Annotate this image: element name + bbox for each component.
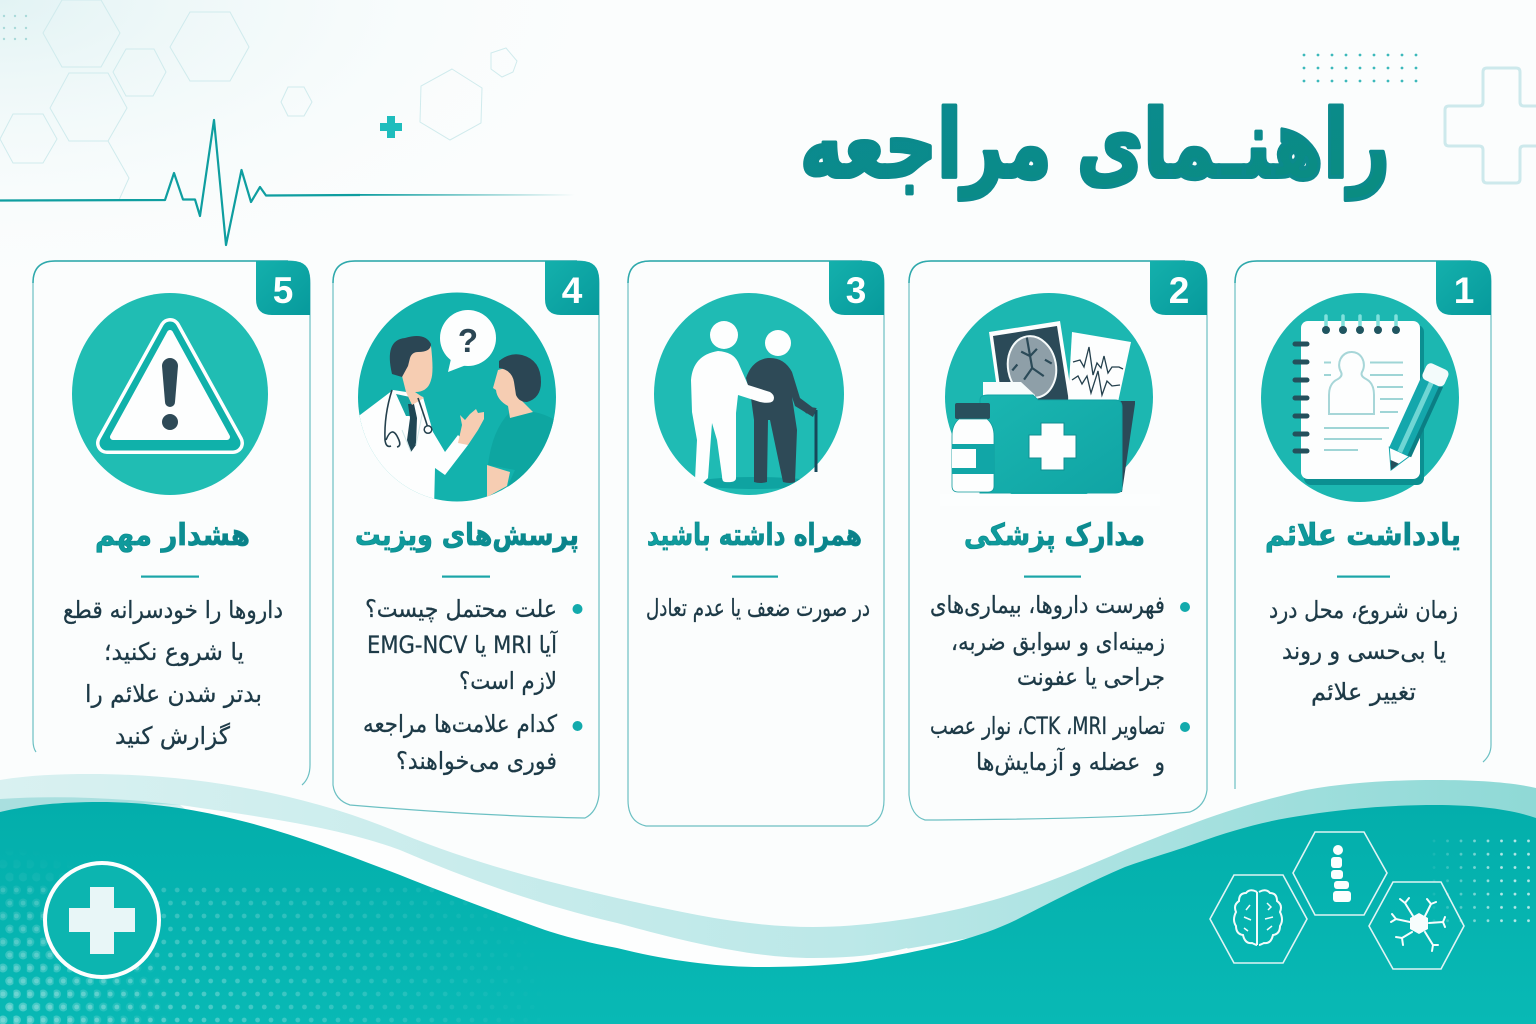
heading: یادداشت علائم	[1265, 518, 1461, 553]
panel: card 3 companion	[628, 261, 884, 826]
badge 1: 1	[1454, 270, 1474, 311]
heading: هشدار مهم	[95, 518, 250, 553]
panel: card 1 symptom notes	[1235, 261, 1491, 789]
decorative hexagons top left	[0, 0, 517, 200]
icon: notepad and pencil	[1261, 293, 1459, 502]
bullet list: جراحی یا عفونت	[1017, 663, 1165, 691]
heartbeat line	[0, 120, 575, 245]
body text: زمان شروع، محل درد	[1269, 596, 1458, 624]
heading: مدارک پزشکی	[964, 518, 1145, 553]
badge 3: 3	[846, 270, 866, 311]
body text: گزارش کنید	[115, 722, 231, 750]
bullet list: و عضله و آزمایش‌ها	[976, 747, 1165, 776]
icon: small plus	[380, 116, 402, 138]
bullet list: فهرست داروها، بیماری‌های	[930, 591, 1165, 619]
badge 3	[829, 261, 884, 315]
icon: spine hexagon	[1293, 832, 1387, 915]
badge 4: 4	[562, 270, 583, 311]
body text: در صورت ضعف یا عدم تعادل	[646, 594, 870, 622]
panel: card 2 medical records	[909, 261, 1207, 820]
bullet list: آیا MRI یا EMG-NCV	[367, 630, 558, 659]
body text	[1269, 596, 1458, 706]
icon: brain hexagon	[1210, 875, 1307, 963]
bullet list: فوری می‌خواهند؟	[396, 747, 557, 775]
footer wave	[0, 774, 1536, 1024]
bullet list: علت محتمل چیست؟	[365, 595, 557, 623]
icon: doctor and patient: ?	[458, 322, 478, 359]
body text: تغییر علائم	[1311, 678, 1416, 706]
bullet list	[930, 591, 1190, 776]
icon: neuron hexagon	[1369, 882, 1464, 969]
body text	[63, 596, 283, 750]
dot grid top right	[1297, 49, 1423, 88]
icon: doctor and patient	[350, 292, 556, 510]
body text: یا شروع نکنید؛	[104, 638, 244, 666]
heading: پرسش‌های ویزیت	[355, 518, 579, 553]
body text: یا بی‌حسی و روند	[1282, 637, 1446, 665]
panel: card 4 visit questions	[333, 261, 599, 818]
icon: warning triangle	[72, 293, 268, 495]
bullet list: زمینه‌ای و سوابق ضربه،	[951, 628, 1165, 656]
badge 5: 5	[273, 270, 293, 311]
badge 2: 2	[1169, 270, 1189, 311]
icon: folder with scans and pill bottle	[940, 293, 1160, 506]
icon: two people with cane	[654, 293, 844, 495]
heading: همراه داشته باشید	[647, 518, 862, 553]
body text: بدتر شدن علائم را	[85, 680, 262, 708]
badge 4	[545, 261, 599, 315]
bullet list: لازم است؟	[459, 667, 557, 695]
icon: outline plus	[1445, 68, 1536, 183]
panel: card 5 warning	[33, 261, 310, 785]
badge 1	[1436, 261, 1491, 315]
badge 2	[1150, 261, 1207, 315]
icon: medical cross badge	[45, 863, 159, 977]
bullet list: تصاویر MRI‏، CTK‏، نوار عصب	[930, 712, 1165, 740]
body text: داروها را خودسرانه قطع	[63, 596, 283, 624]
bullet list: کدام علامت‌ها مراجعه	[363, 710, 558, 738]
bullet list	[363, 595, 582, 775]
badge 5	[256, 261, 310, 315]
